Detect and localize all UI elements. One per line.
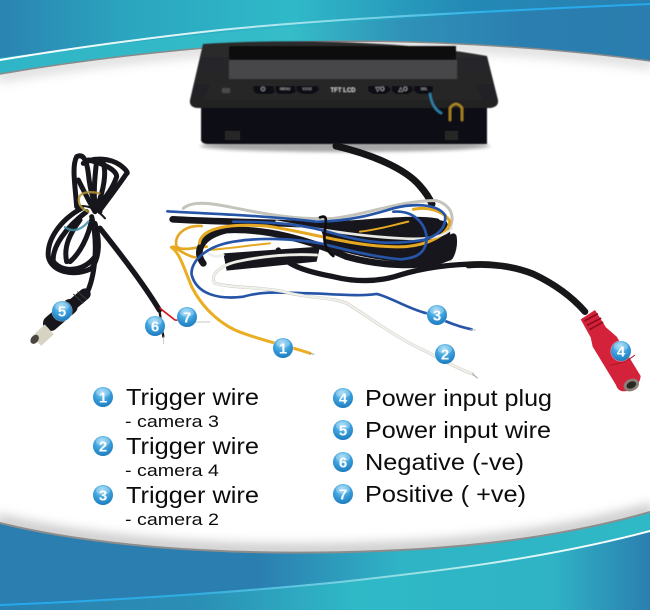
bottom wave band bbox=[0, 512, 650, 610]
badge 3 on blue wire: 3 bbox=[433, 308, 441, 324]
monitor button labels bbox=[261, 86, 428, 94]
badge 5 on plug wire: 5 bbox=[58, 304, 66, 320]
badge 2 on white wire bbox=[434, 343, 456, 365]
wire tail to 6 and 7 bbox=[100, 228, 159, 310]
legend item 3: 3 bbox=[99, 488, 107, 504]
monitor button labels: ▽O bbox=[374, 87, 385, 93]
legend item 1 bbox=[92, 384, 259, 431]
badge 6 on negative wire: 6 bbox=[151, 318, 159, 336]
DC barrel plug bbox=[29, 292, 87, 345]
badge 1 on yellow wire bbox=[272, 337, 294, 359]
black long cable bbox=[278, 250, 490, 280]
monitor cable bbox=[336, 146, 432, 204]
badge 7 on positive wire bbox=[176, 306, 198, 328]
badge 2 on white wire: 2 bbox=[441, 346, 449, 364]
power cable to plug bbox=[468, 265, 585, 312]
legend item 5: 5 bbox=[339, 422, 347, 440]
black bundle mass bbox=[223, 218, 451, 271]
legend item 7: Positive ( +ve) bbox=[365, 481, 526, 507]
legend item 1: - camera 3 bbox=[125, 412, 219, 431]
legend item 1: 1 bbox=[99, 390, 107, 406]
wire bundle bbox=[167, 201, 490, 378]
legend item 4: Power input plug bbox=[365, 385, 552, 411]
red power plug bbox=[581, 310, 641, 394]
yellow loops bbox=[173, 226, 207, 257]
legend item 6: 6 bbox=[339, 454, 347, 472]
monitor button labels: SEL bbox=[421, 87, 428, 91]
black cables bbox=[173, 219, 448, 260]
legend right column bbox=[332, 385, 552, 507]
cable tie bbox=[320, 217, 333, 256]
blue upper wire bbox=[167, 205, 445, 243]
legend left column bbox=[92, 384, 259, 529]
badge 4 on red plug: 4 bbox=[617, 344, 626, 360]
monitor button labels: △O bbox=[397, 86, 408, 93]
legend item 5: Power input wire bbox=[365, 417, 551, 443]
yellow through bundle bbox=[199, 208, 450, 247]
monitor screen bbox=[229, 60, 457, 79]
legend item 6: Negative (-ve) bbox=[365, 449, 524, 475]
badge 7 on positive wire: 7 bbox=[183, 310, 191, 326]
legend item 3: Trigger wire bbox=[126, 482, 259, 508]
white inner bbox=[277, 222, 452, 239]
power input wire coil bbox=[29, 156, 210, 345]
monitor buttons bbox=[253, 86, 433, 94]
yellow tail wire bbox=[171, 247, 310, 353]
legend item 1: Trigger wire bbox=[126, 384, 259, 410]
legend item 2: 2 bbox=[99, 438, 107, 456]
legend item 2 bbox=[92, 433, 259, 480]
badge 4 on red plug bbox=[610, 340, 632, 362]
monitor button labels: TFT LCD bbox=[330, 88, 356, 94]
top wave band bbox=[0, 0, 650, 74]
badge 6 on negative wire bbox=[144, 315, 166, 337]
white tail wire bbox=[213, 255, 473, 374]
watermark on monitor bbox=[430, 94, 462, 120]
legend item 4: 4 bbox=[339, 390, 348, 408]
white wire loop bbox=[183, 201, 455, 260]
monitor button labels: V1/V2 bbox=[302, 87, 312, 91]
badge 5 on plug wire bbox=[51, 300, 73, 322]
badge 1 on yellow wire: 1 bbox=[279, 340, 287, 358]
badge 3 on blue wire bbox=[426, 304, 448, 326]
legend item 2: Trigger wire bbox=[126, 433, 259, 459]
monitor button labels: ⏻ bbox=[261, 86, 266, 93]
monitor button labels: MENU bbox=[280, 87, 291, 91]
monitor bbox=[190, 41, 498, 152]
legend item 3 bbox=[92, 482, 259, 529]
watermark on coil bbox=[65, 192, 99, 230]
legend item 3: - camera 2 bbox=[125, 510, 219, 529]
legend item 2: - camera 4 bbox=[125, 461, 219, 480]
legend item 7: 7 bbox=[339, 486, 347, 504]
